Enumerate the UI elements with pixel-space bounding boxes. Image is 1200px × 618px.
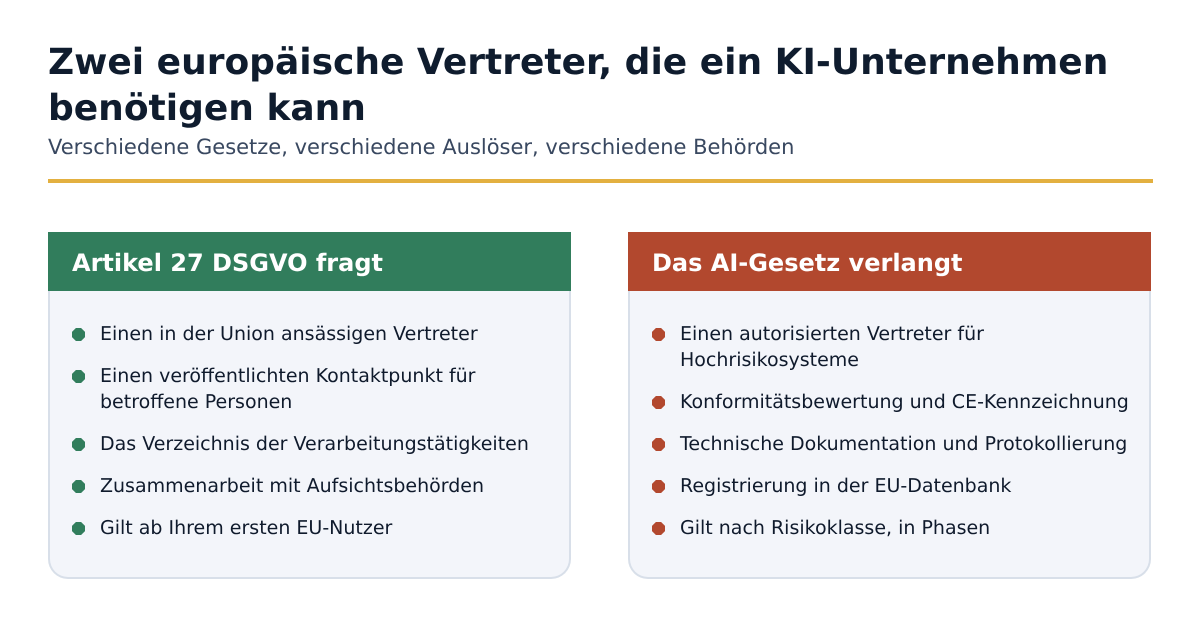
bullet list right bbox=[652, 323, 1129, 539]
bullet text: Das Verzeichnis der Verarbeitungstätigkeiten bbox=[100, 433, 529, 455]
bullet text bbox=[100, 365, 476, 413]
panel: AI-Gesetz bbox=[628, 291, 1151, 579]
bullet text: Konformitätsbewertung und CE-Kennzeichnung bbox=[680, 391, 1129, 413]
gold divider bbox=[48, 179, 1153, 183]
panel: Artikel 27 DSGVO bbox=[48, 291, 571, 579]
bullet icon bbox=[652, 522, 665, 535]
bullet text: Zusammenarbeit mit Aufsichtsbehörden bbox=[100, 475, 484, 497]
bullet icon bbox=[652, 396, 665, 409]
bullet text: Einen veröffentlichten Kontaktpunkt für bbox=[100, 365, 476, 387]
panel body left bbox=[48, 232, 571, 579]
panel heading left bbox=[48, 232, 571, 291]
title: benötigen kann bbox=[48, 88, 366, 129]
bullet text: Technische Dokumentation und Protokollierung bbox=[680, 433, 1127, 455]
bullet text: Hochrisikosysteme bbox=[680, 349, 859, 371]
bullet icon bbox=[652, 480, 665, 493]
bullet icon bbox=[652, 438, 665, 451]
bullet icon bbox=[652, 328, 665, 341]
panel heading right bbox=[628, 232, 1151, 291]
panel body right bbox=[628, 232, 1151, 579]
bullet icon bbox=[72, 438, 85, 451]
title: Zwei europäische Vertreter, die ein KI-Unternehmen bbox=[48, 42, 1108, 83]
bullet text: Gilt nach Risikoklasse, in Phasen bbox=[680, 517, 990, 539]
bullet icon bbox=[72, 370, 85, 383]
panel heading right: Das AI-Gesetz verlangt bbox=[652, 249, 962, 277]
bullet icon bbox=[72, 328, 85, 341]
bullet text: Einen autorisierten Vertreter für bbox=[680, 323, 984, 345]
bullet text: Einen in der Union ansässigen Vertreter bbox=[100, 323, 478, 345]
bullet text: Registrierung in der EU-Datenbank bbox=[680, 475, 1011, 497]
bullet text bbox=[680, 323, 984, 371]
bullet text: Gilt ab Ihrem ersten EU-Nutzer bbox=[100, 517, 392, 539]
bullet icon bbox=[72, 522, 85, 535]
bullet icon bbox=[72, 480, 85, 493]
subtitle: Verschiedene Gesetze, verschiedene Auslöser, verschiedene Behörden bbox=[48, 135, 794, 159]
bullet text: betroffene Personen bbox=[100, 391, 292, 413]
bullet list left bbox=[72, 323, 529, 539]
title bbox=[48, 42, 1108, 129]
panel heading left: Artikel 27 DSGVO fragt bbox=[72, 249, 383, 277]
